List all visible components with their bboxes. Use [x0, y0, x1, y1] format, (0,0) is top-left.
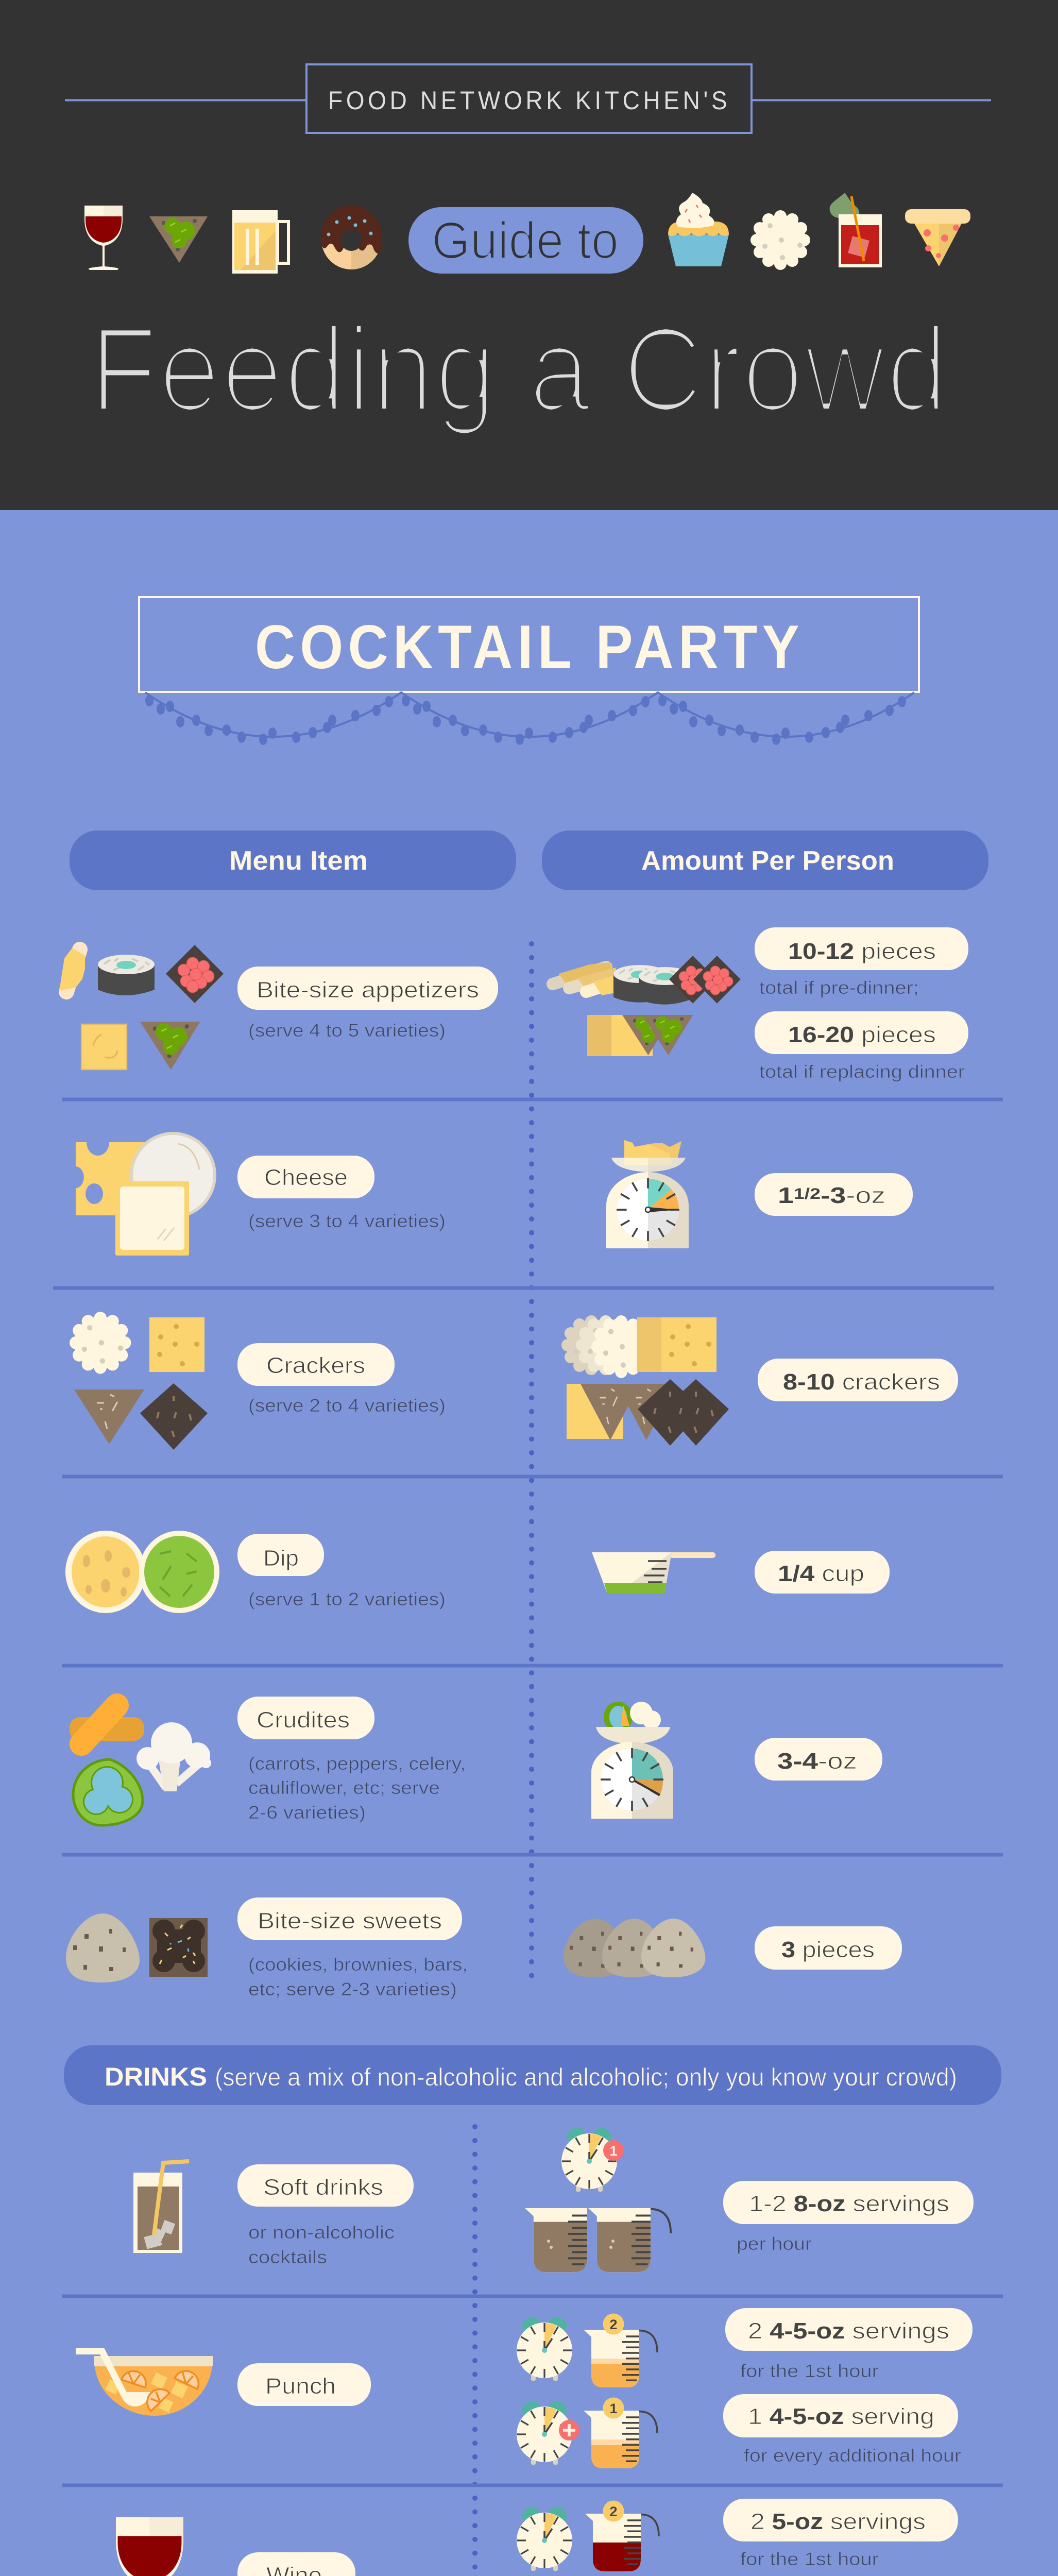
row: wine [116, 2499, 961, 2576]
label: dip: Dip [263, 1546, 299, 1571]
label: bite-size appetizers [237, 967, 498, 1010]
icon: pizza slice [905, 209, 970, 266]
title: Feeding a Crowd [89, 303, 948, 436]
note: total if replacing dinner: total if replacing dinner [759, 1062, 965, 1082]
label: crackers: Crackers [266, 1353, 365, 1378]
graphic: wine first hour [517, 2501, 659, 2572]
kicker box [306, 64, 752, 133]
icon: beer mug [232, 210, 288, 274]
icon group: amount of appetizers [553, 956, 741, 1056]
label: wine [237, 2552, 355, 2576]
amount: 1-2 8-oz servings: 1-2 8-oz servings [749, 2191, 949, 2216]
label: crackers [237, 1343, 395, 1386]
kicker rule [65, 99, 991, 101]
label: punch [237, 2363, 371, 2406]
note: varieties: (serve 1 to 2 varieties) [248, 1589, 446, 1609]
icon: measuring cup [592, 1552, 715, 1594]
label: bite-size sweets: Bite-size sweets [258, 1908, 442, 1934]
icon: guacamole cracker [149, 216, 208, 263]
amount: 1 4-5-oz serving [723, 2394, 958, 2437]
icon: one hour clock [561, 2125, 624, 2192]
note: varieties: (serve 2 to 4 varieties) [248, 1396, 446, 1416]
row: dip [65, 1531, 890, 1613]
amount: 8-10 crackers: 8-10 crackers [783, 1369, 940, 1395]
row: crudites [70, 1697, 882, 1825]
graphic: punch first hour: 2 [609, 2317, 618, 2332]
note: varieties: (serve 3 to 4 varieties) [248, 1211, 446, 1231]
icon group: appetizers [59, 945, 224, 1070]
column header: amount per person [542, 831, 988, 890]
icon: wine glass [116, 2517, 183, 2576]
label: bite-size appetizers: Bite-size appetizers [257, 977, 479, 1003]
note: first hour: for the 1st hour [740, 2549, 879, 2569]
icon group: amount of crackers [561, 1315, 729, 1446]
label: soft drinks [237, 2164, 414, 2207]
icon: kitchen scale with vegetables [591, 1702, 673, 1819]
column header: menu item [70, 831, 516, 890]
banner: drinks: (serve a mix of non-alcoholic and alcoholic; only you know your crowd) [215, 2064, 957, 2091]
icon group: sweets [66, 1913, 208, 1982]
label: bite-size sweets [237, 1897, 462, 1940]
amount: 3-4 oz: 3-4 -oz [777, 1749, 857, 1774]
icon: cupcake [668, 193, 729, 266]
amount: 10-12 pieces [755, 927, 968, 970]
garland [145, 692, 914, 745]
banner: drinks [64, 2045, 1001, 2105]
amount: 3 pieces: 3 pieces [781, 1937, 875, 1962]
amount: 1 1/2 to 3 oz: -3 [821, 1183, 846, 1208]
label: crudites: Crudites [257, 1707, 350, 1733]
amount: 8-10 crackers [758, 1359, 958, 1401]
note: total if pre-dinner: total if pre-dinner; [759, 978, 919, 998]
row: bite-size sweets [66, 1897, 902, 1999]
note: per hour: per hour [737, 2234, 812, 2254]
amount: 1 1/2 to 3 oz: 1 [778, 1183, 794, 1208]
icon: wine glass [84, 206, 123, 270]
banner: drinks: DRINKS [105, 2062, 207, 2091]
icon: round cracker [750, 210, 810, 270]
amount: 2 4-5-oz servings [725, 2308, 972, 2351]
note: crudites varieties: 2-6 varieties) [248, 1803, 366, 1823]
label: crudites [237, 1697, 374, 1739]
note: crudites varieties: cauliflower, etc; serve [248, 1778, 440, 1798]
amount: 2 5-oz servings: 2 5-oz servings [750, 2509, 926, 2534]
label: soft drinks: Soft drinks [263, 2175, 383, 2200]
note: sweets varieties: (cookies, brownies, bars, [248, 1955, 468, 1975]
icon group: amount of sweets [564, 1919, 705, 1977]
icon group: dip bowls [65, 1531, 219, 1613]
graphic: punch first hour [517, 2313, 657, 2388]
icon: bloody mary [830, 193, 882, 267]
row: soft drinks [133, 2125, 974, 2274]
icon: kitchen scale with cheese [606, 1140, 689, 1248]
row: cheese [76, 1132, 913, 1256]
graphic: wine first hour: 2 [609, 2504, 618, 2519]
note: crudites varieties: (carrots, peppers, celery, [248, 1754, 466, 1774]
graphic: punch additional hour: 1 [609, 2401, 618, 2416]
amount: 16-20 pieces: 16-20 pieces [788, 1022, 936, 1047]
column header: amount per person: Amount Per Person [641, 846, 894, 876]
amount: 2 4-5-oz servings: 2 4-5-oz servings [748, 2318, 949, 2344]
icon group: cheese [76, 1132, 216, 1256]
column header: menu item: Menu Item [229, 846, 368, 876]
amount: 1 4-5-oz serving: 1 4-5-oz serving [748, 2404, 934, 2429]
panel: header [0, 0, 1058, 510]
note: additional hour: for every additional hour [744, 2446, 961, 2466]
icon: soft drink glass [133, 2161, 189, 2253]
heading: cocktail party [139, 597, 919, 692]
amount: 1 1/2 to 3 oz [755, 1173, 913, 1216]
pill: guide to: Guide to [432, 212, 619, 269]
amount: 10-12 pieces: 10-12 pieces [788, 939, 936, 964]
note: varieties: (serve 4 to 5 varieties) [248, 1021, 446, 1041]
note: sweets varieties: etc; serve 2-3 varieties) [248, 1979, 457, 1999]
graphic: punch additional hour [517, 2398, 657, 2469]
row: crackers [70, 1312, 958, 1450]
amount: 3 pieces [755, 1926, 902, 1970]
label: cheese: Cheese [264, 1165, 348, 1190]
icon: one hour clock: 1 [609, 2143, 618, 2159]
amount: 1 1/2 to 3 oz: 1/2 [794, 1185, 821, 1202]
kicker box: FOOD NETWORK KITCHEN'S [328, 87, 727, 115]
icon group: crudites [70, 1705, 211, 1825]
label: punch: Punch [265, 2374, 336, 2399]
amount: 1-2 8-oz servings [723, 2181, 974, 2224]
amount: 16-20 pieces [755, 1011, 968, 1054]
note: sweets varieties [248, 1955, 468, 1999]
amount: 3-4 oz [755, 1738, 882, 1781]
amount: 1/4 cup: 1/4 cup [778, 1561, 864, 1586]
amount: 1 1/2 to 3 oz: -oz [846, 1183, 877, 1208]
label: dip [237, 1534, 324, 1576]
icon: punch bowl [76, 2351, 213, 2416]
amount: 2 5-oz servings [723, 2499, 958, 2541]
note: non-alcoholic: or non-alcoholic [248, 2223, 395, 2243]
note: crudites varieties [248, 1754, 466, 1823]
note: first hour: for the 1st hour [740, 2361, 879, 2381]
row: punch [76, 2308, 972, 2469]
heading: cocktail party: COCKTAIL PARTY [255, 613, 799, 682]
note: non-alcoholic: cocktails [248, 2247, 327, 2267]
row: bite-size appetizers [59, 927, 968, 1082]
amount: 1/4 cup [755, 1551, 890, 1594]
icon: donut [321, 206, 381, 269]
icon: two soft drink jugs [525, 2208, 671, 2274]
note: non-alcoholic [248, 2223, 395, 2267]
icon group: crackers [70, 1312, 208, 1450]
label: cheese [237, 1156, 374, 1198]
